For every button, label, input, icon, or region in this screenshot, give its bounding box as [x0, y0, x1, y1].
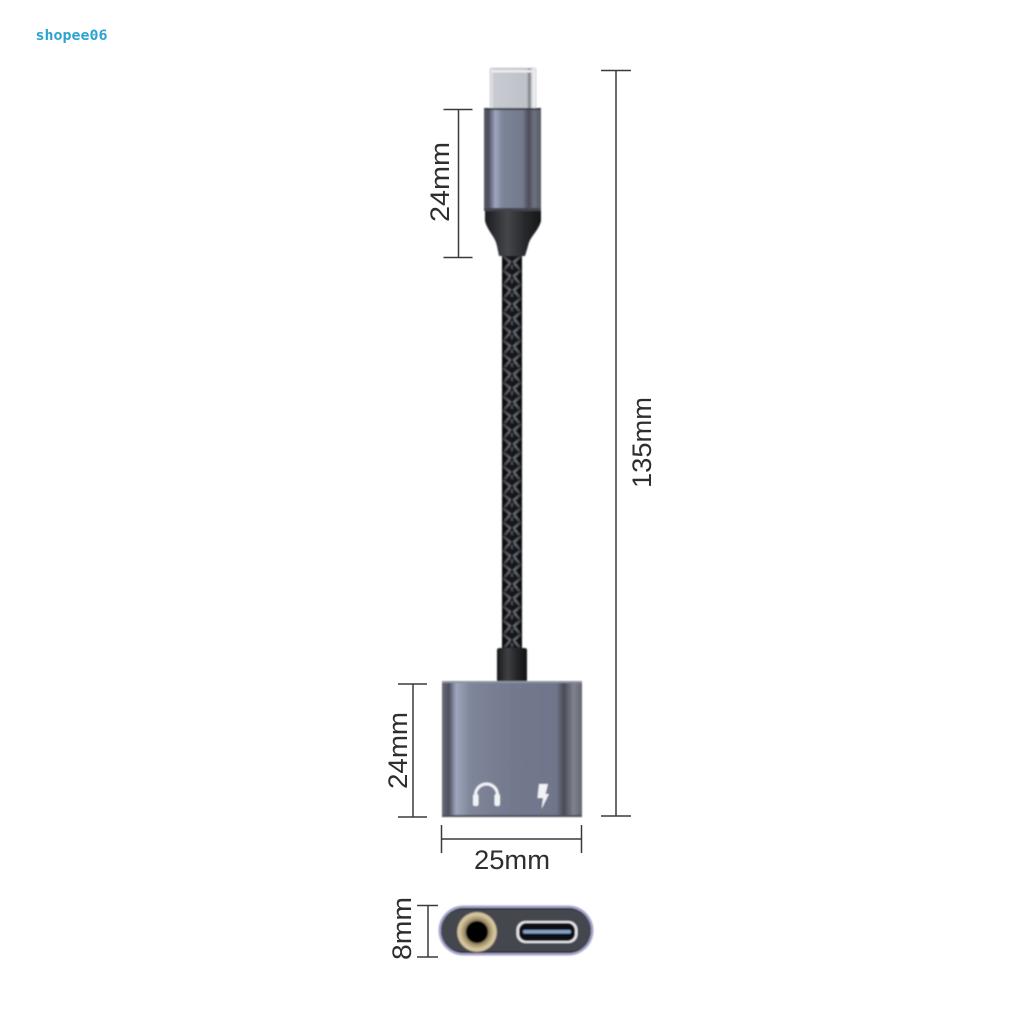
adapter body: [442, 681, 582, 817]
plug metal housing: [484, 108, 541, 211]
icon: lightning bolt: [538, 784, 549, 809]
dimension: total 135mm: [601, 70, 657, 816]
dimension: body width 25mm: 25mm: [474, 845, 550, 875]
port: USB-C socket: [516, 921, 578, 943]
adapter strain relief: [497, 648, 527, 682]
plug strain relief boot: [485, 211, 541, 256]
port: 3.5mm jack: [457, 912, 497, 952]
icon: headphones: [473, 784, 500, 806]
dimension: plug 24mm: [425, 110, 472, 258]
dimension: plug 24mm: 24mm: [425, 142, 455, 222]
dimension: body height 24mm: 24mm: [383, 712, 413, 789]
dimension: body height 24mm: [383, 684, 427, 817]
adapter end view: [438, 906, 594, 956]
dimension: thickness 8mm: [387, 897, 438, 960]
dimension: thickness 8mm: 8mm: [387, 897, 417, 960]
dimension: body width 25mm: [442, 825, 582, 875]
product drawing: [438, 68, 594, 956]
braided cable: [502, 254, 522, 652]
watermark: shopee06: shopee06: [36, 28, 108, 44]
USB-C plug tip: [490, 68, 536, 109]
dimension: total 135mm: 135mm: [627, 397, 657, 488]
